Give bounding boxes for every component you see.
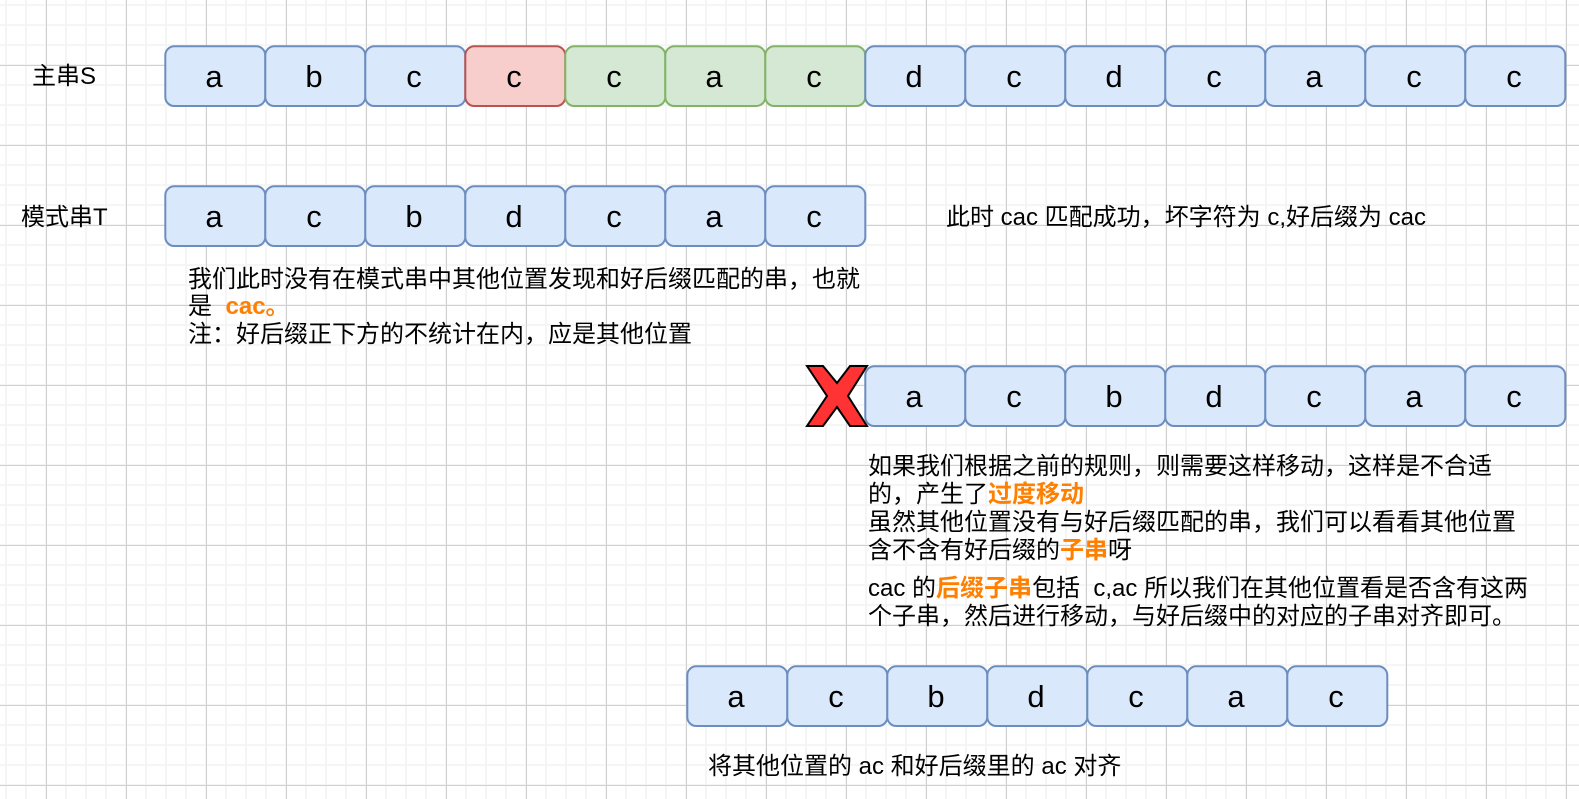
row: aligned pattern cells: a (727, 679, 745, 714)
row: over-shifted pattern cells: a (905, 379, 923, 414)
row: over-shifted pattern cells: b (1105, 379, 1123, 414)
row: main string S cells: c (1206, 59, 1222, 94)
icon: red cross (807, 366, 867, 426)
label: pattern string T: 模式串T (21, 204, 108, 231)
row: main string S cells: c (406, 59, 422, 94)
row: main string S cells: a (205, 59, 223, 94)
row: pattern string T cells (165, 186, 865, 246)
bad character cell: c (506, 59, 522, 94)
row: pattern string T cells: c (306, 199, 322, 234)
text: over-shift explanation: cac 的后缀子串包括 c,ac 所以我们在其他位置看是否含有这两 (868, 575, 1528, 602)
text: match status: 此时 cac 匹配成功，坏字符为 c,好后缀为 cac (946, 204, 1426, 231)
row: pattern string T cells: b (405, 199, 423, 234)
text: over-shift explanation: 虽然其他位置没有与好后缀匹配的串，我们可以看看其他位置 (868, 509, 1516, 536)
good suffix cells (565, 46, 865, 106)
text: no match explanation (188, 266, 860, 348)
good suffix cells: a (705, 59, 723, 94)
row: aligned pattern cells: c (1128, 679, 1144, 714)
text: no match explanation: 是 (188, 293, 212, 320)
bad character cell (465, 46, 565, 106)
row: over-shifted pattern cells: c (1006, 379, 1022, 414)
good suffix cells: c (606, 59, 622, 94)
row: main string S cells: d (1105, 59, 1123, 94)
row: main string S cells: c (1506, 59, 1522, 94)
row: pattern string T cells: d (505, 199, 523, 234)
row: aligned pattern cells: c (828, 679, 844, 714)
row: over-shifted pattern cells: d (1205, 379, 1223, 414)
row: main string S cells: d (905, 59, 923, 94)
text: over-shift explanation: 的，产生了过度移动 (868, 481, 1084, 508)
row: pattern string T cells: a (705, 199, 723, 234)
text: no match explanation: 我们此时没有在模式串中其他位置发现和好后缀匹配的串，也就 (188, 266, 860, 293)
row: pattern string T cells: c (806, 199, 822, 234)
row: aligned pattern cells: c (1328, 679, 1344, 714)
label: main string S: 主串S (32, 63, 96, 90)
row: pattern string T cells: c (606, 199, 622, 234)
row: pattern string T cells: a (205, 199, 223, 234)
row: main string S cells: c (1006, 59, 1022, 94)
text: alignment note: 将其他位置的 ac 和好后缀里的 ac 对齐 (708, 753, 1121, 780)
row: over-shifted pattern cells: c (1306, 379, 1322, 414)
good suffix cells: c (806, 59, 822, 94)
row: main string S cells: b (305, 59, 323, 94)
text: over-shift explanation: 个子串，然后进行移动，与好后缀中的对应的子串对齐即可。 (868, 603, 1516, 630)
row: over-shifted pattern cells: a (1405, 379, 1423, 414)
text: no match explanation: cac。 (226, 293, 290, 320)
row: main string S cells: a (1305, 59, 1323, 94)
text: over-shift explanation: 含不含有好后缀的子串呀 (868, 537, 1132, 564)
row: main string S cells (165, 46, 1565, 106)
row: aligned pattern cells (687, 666, 1387, 726)
row: main string S cells: c (1406, 59, 1422, 94)
row: over-shifted pattern cells: c (1506, 379, 1522, 414)
row: aligned pattern cells: d (1027, 679, 1045, 714)
text: no match explanation: 注：好后缀正下方的不统计在内，应是其他位置 (188, 321, 692, 348)
text: over-shift explanation (868, 453, 1528, 630)
row: aligned pattern cells: a (1227, 679, 1245, 714)
row: over-shifted pattern cells (865, 366, 1565, 426)
row: aligned pattern cells: b (927, 679, 945, 714)
text: over-shift explanation: 如果我们根据之前的规则，则需要这样移动，这样是不合适 (868, 453, 1492, 480)
